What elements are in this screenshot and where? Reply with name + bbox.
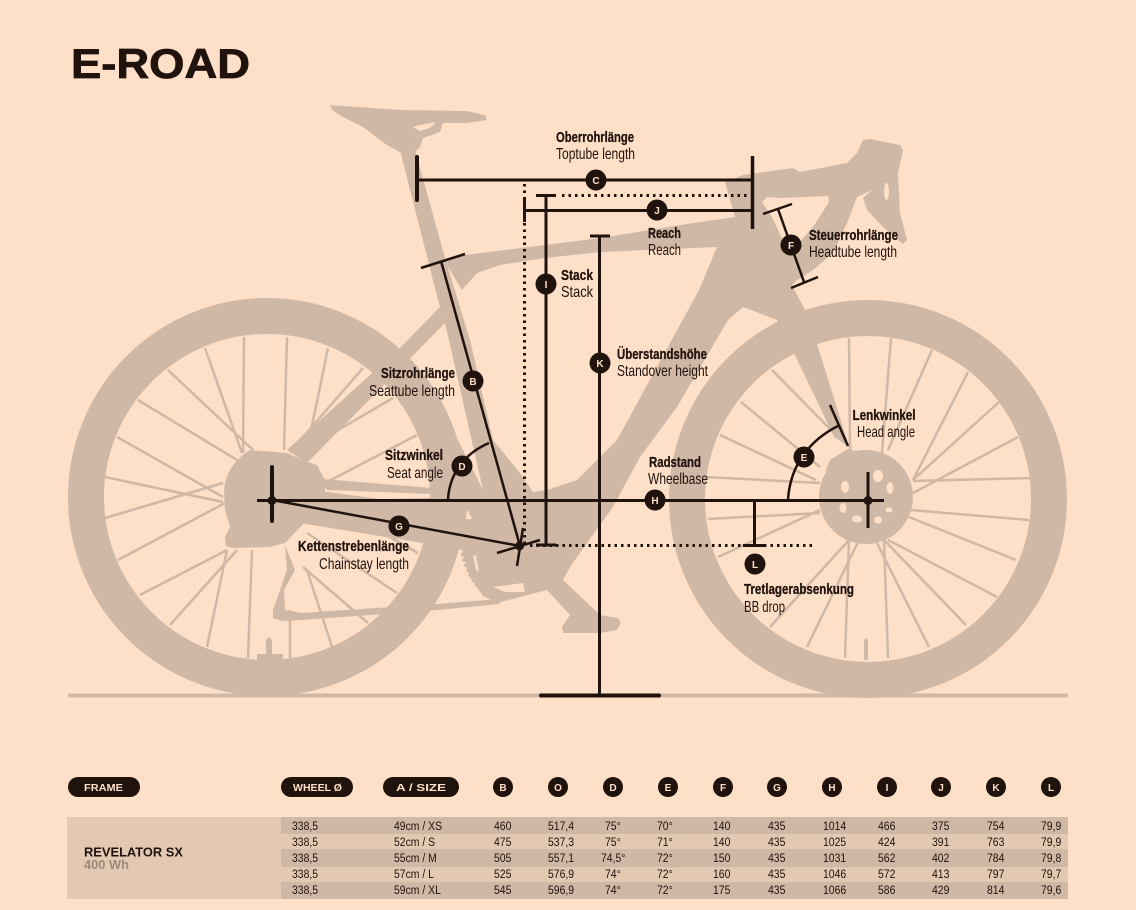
column letters: F (720, 783, 726, 794)
row L: 572 (878, 868, 895, 881)
row M: 557,1 (548, 852, 574, 865)
column letters: E (665, 783, 672, 794)
row S: 52cm / S (394, 836, 435, 849)
row M: 74,5° (601, 852, 625, 865)
stack dimension I: Stack (561, 267, 594, 284)
chainstay dimension G: Kettenstrebenlänge (298, 538, 409, 555)
row L: 413 (932, 868, 949, 881)
column letters: G (773, 783, 781, 794)
column letters: B (499, 783, 507, 794)
pill: size (383, 777, 459, 797)
row M: 435 (768, 852, 785, 865)
row M: 150 (713, 852, 730, 865)
row S: 1025 (823, 836, 846, 849)
seat tube dimension B: B (469, 377, 477, 388)
row L: 72° (657, 868, 673, 881)
top tube dimension C: C (592, 176, 600, 187)
row M: 72° (657, 852, 673, 865)
title: E-ROAD (71, 40, 250, 87)
row S: 75° (605, 836, 621, 849)
seat tube dimension B: Seattube length (369, 383, 455, 400)
column letters: J (938, 783, 944, 794)
seat angle D: Sitzwinkel (385, 447, 443, 464)
reach dimension J: Reach (648, 242, 681, 259)
row S: 338,5 (292, 836, 318, 849)
row XS: 435 (768, 820, 785, 833)
standover dimension K: Standover height (617, 363, 708, 380)
row S: 537,3 (548, 836, 574, 849)
seat tube dimension B: Sitzrohrlänge (381, 365, 455, 382)
row S: 475 (494, 836, 511, 849)
bottom bracket drop L: L (752, 560, 758, 571)
row XL: 1066 (823, 884, 846, 897)
model name (84, 844, 183, 872)
row XL: 72° (657, 884, 673, 897)
row L: 74° (605, 868, 621, 881)
row XL: 435 (768, 884, 785, 897)
column letters: L (1048, 783, 1054, 794)
row XL: 79,6 (1041, 884, 1061, 897)
wheelbase dimension H: Wheelbase (648, 471, 708, 488)
seat angle D: Seat angle (387, 465, 443, 482)
reach dimension J: J (654, 206, 660, 217)
row M: 562 (878, 852, 895, 865)
wheelbase dimension H: Radstand (649, 454, 701, 471)
saddle (330, 105, 487, 152)
row XL: 338,5 (292, 884, 318, 897)
row M (292, 852, 1061, 865)
column letters: H (828, 783, 836, 794)
rear wheel (86, 316, 500, 678)
row XS: 49cm / XS (394, 820, 442, 833)
head tube dimension F: Headtube length (809, 244, 897, 261)
row S: 763 (987, 836, 1004, 849)
head angle E: Lenkwinkel (852, 407, 916, 424)
model name: REVELATOR SX (84, 844, 183, 860)
standover dimension K: Überstandshöhe (617, 346, 707, 363)
row XL: 74° (605, 884, 621, 897)
row M: 338,5 (292, 852, 318, 865)
standover dimension K: K (596, 359, 604, 370)
row M: 505 (494, 852, 511, 865)
chainstay dimension G (272, 500, 540, 573)
row XS: 79,9 (1041, 820, 1061, 833)
row L: 797 (987, 868, 1004, 881)
row XS: 754 (987, 820, 1004, 833)
row XS: 375 (932, 820, 949, 833)
pill: frame: FRAME (84, 783, 123, 794)
head tube dimension F (763, 204, 898, 288)
row M: 784 (987, 852, 1004, 865)
row XL: 429 (932, 884, 949, 897)
row M: 55cm / M (394, 852, 437, 865)
front wheel (687, 318, 1049, 680)
row L: 57cm / L (394, 868, 434, 881)
column letters: I (886, 783, 889, 794)
chainstay dimension G: Chainstay length (319, 556, 409, 573)
row M: 79,8 (1041, 852, 1061, 865)
row L: 576,9 (548, 868, 574, 881)
row S: 435 (768, 836, 785, 849)
top tube dimension C (417, 129, 752, 229)
frame and handlebar (400, 150, 540, 560)
row XL: 545 (494, 884, 511, 897)
row XS: 460 (494, 820, 511, 833)
row L: 79,7 (1041, 868, 1061, 881)
wheelbase dimension H (257, 454, 884, 528)
head angle E: Head angle (857, 424, 915, 441)
row M: 402 (932, 852, 949, 865)
bottom bracket drop L (743, 500, 854, 616)
model name: 400 Wh (84, 857, 129, 872)
head tube dimension F: F (788, 241, 794, 252)
column letters: D (609, 783, 617, 794)
seat tube dimension B (369, 254, 520, 546)
table background rows (67, 817, 1068, 899)
pill: size: A / SIZE (396, 783, 446, 794)
row S: 391 (932, 836, 949, 849)
column letters (493, 777, 1061, 797)
row L: 338,5 (292, 868, 318, 881)
ground line (68, 694, 1068, 698)
row XS: 140 (713, 820, 730, 833)
row L: 1046 (823, 868, 846, 881)
stack dimension I: Stack (561, 284, 594, 301)
geometry table (67, 817, 1068, 899)
stack dimension I (536, 195, 594, 545)
bottom bracket drop L: BB drop (744, 599, 785, 616)
table header (68, 777, 1061, 797)
row S: 424 (878, 836, 895, 849)
chainstay dimension G: G (395, 522, 403, 533)
row XS: 70° (657, 820, 673, 833)
reach dimension J (524, 197, 752, 259)
dotted guide lines (524, 184, 815, 546)
wheelbase dimension H: H (651, 496, 659, 507)
row XL: 596,9 (548, 884, 574, 897)
row L (292, 868, 1061, 881)
stack dimension I: I (545, 280, 548, 291)
row XS: 338,5 (292, 820, 318, 833)
head angle E (788, 405, 916, 500)
top tube dimension C: Toptube length (556, 146, 635, 163)
row S: 140 (713, 836, 730, 849)
pill: wheel (281, 777, 353, 797)
reach dimension J: Reach (648, 225, 681, 242)
top tube dimension C: Oberrohrlänge (556, 129, 634, 146)
row XL: 814 (987, 884, 1004, 897)
row XS (292, 820, 1061, 833)
row L: 435 (768, 868, 785, 881)
row XL: 586 (878, 884, 895, 897)
row XS: 466 (878, 820, 895, 833)
dimension lines (257, 129, 916, 696)
row XL: 59cm / XL (394, 884, 441, 897)
column letters: K (992, 783, 1000, 794)
row XL (292, 884, 1061, 897)
row XS: 75° (605, 820, 621, 833)
head tube dimension F: Steuerrohrlänge (809, 227, 898, 244)
pill: frame (68, 777, 140, 797)
row S: 79,9 (1041, 836, 1061, 849)
bottom bracket drop L: Tretlagerabsenkung (744, 581, 854, 598)
row S: 71° (657, 836, 673, 849)
head angle E: E (801, 453, 808, 464)
row XS: 1014 (823, 820, 846, 833)
row XS: 517,4 (548, 820, 574, 833)
standover dimension K (541, 236, 708, 696)
row S (292, 836, 1061, 849)
seat angle D: D (458, 462, 466, 473)
row L: 525 (494, 868, 511, 881)
row L: 160 (713, 868, 730, 881)
column letters: O (554, 783, 562, 794)
row XL: 175 (713, 884, 730, 897)
row M: 1031 (823, 852, 846, 865)
pill: wheel: WHEEL Ø (293, 783, 342, 794)
bike silhouette (68, 105, 1068, 698)
seat angle D (385, 443, 489, 499)
